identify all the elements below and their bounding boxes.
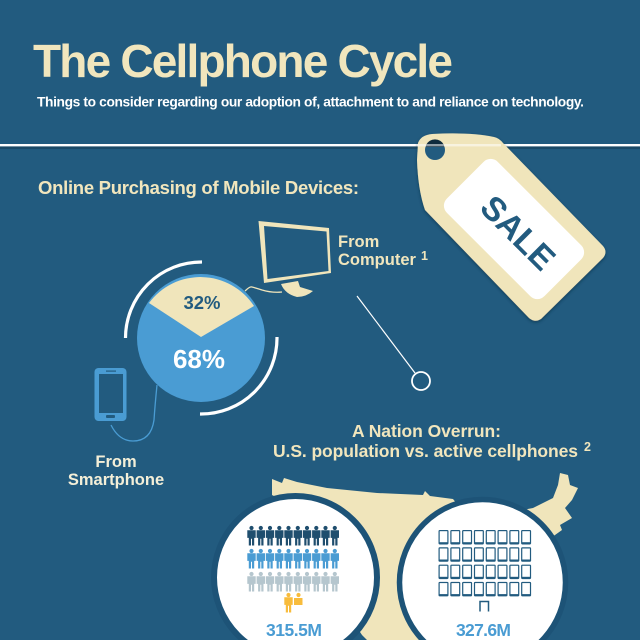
pie slice: computer 32% [149,277,254,337]
panel: population circle [214,496,377,640]
heading: online purchasing: Online Purchasing of Mobile Devices: [38,177,359,198]
label: from smartphone: Smartphone [68,471,164,489]
value: 327.6M: 327.6M [456,620,511,640]
pie chart [137,274,265,402]
people row: gold remainder [284,593,302,613]
icon: computer monitor [245,221,331,297]
connector line with circle [357,296,430,390]
label: from computer: 1 [421,249,428,263]
map: united states [272,473,578,640]
value: 32%: 32% [183,292,221,313]
icon: sale tag [417,133,606,321]
heading: a nation overrun: U.S. population vs. active cellphones [273,441,578,461]
subtitle: Things to consider regarding our adoption of, attachment to and reliance on technology. [37,94,584,110]
icon: sale tag: SALE [473,189,562,278]
label: from computer: Computer [338,251,416,269]
people row: light blue [247,549,339,569]
heading: a nation overrun: A Nation Overrun: [352,421,501,441]
arc: upper left [126,262,202,338]
arc: lower right [200,337,277,414]
phones grid [438,530,531,596]
value: 68%: 68% [173,344,225,374]
title: The Cellphone Cycle [33,35,453,87]
icon: smartphone [94,368,157,441]
label: from computer: From [338,233,379,251]
people row: dark blue [247,526,339,546]
label: from smartphone: From [95,453,137,471]
people row: grey [247,572,339,592]
panel: cellphones circle [400,500,566,640]
value: 315.5M: 315.5M [266,620,322,640]
heading: a nation overrun: 2 [584,440,591,454]
partial phone [480,602,488,612]
